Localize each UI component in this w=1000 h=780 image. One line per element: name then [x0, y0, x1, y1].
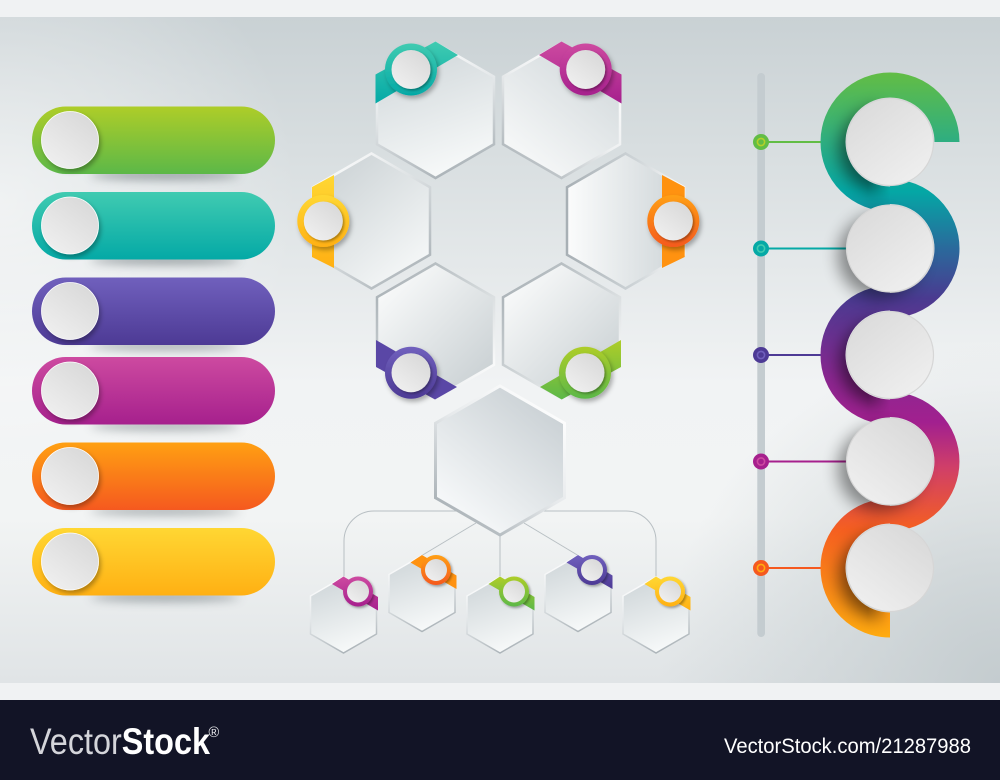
- marker 2 teal: [753, 240, 848, 256]
- bar 5: orange: [32, 442, 275, 515]
- marker 3 purple: [753, 347, 823, 363]
- footer logo: VectorStock: [30, 721, 210, 762]
- hexagon: lower right green: [503, 264, 621, 400]
- marker 4 magenta: [753, 454, 848, 470]
- hexagon: right orange: [567, 154, 699, 288]
- footer image id: VectorStock.com/21287988: [724, 735, 971, 758]
- timeline discs: [838, 98, 934, 619]
- hexagon: top left teal: [376, 42, 494, 178]
- marker 5 orange: [753, 560, 823, 576]
- connector lines: [344, 511, 656, 580]
- small hexagon: yellow: [623, 576, 690, 653]
- footer band: [0, 700, 1000, 780]
- small hexagon: magenta: [310, 576, 378, 653]
- serpentine gradient ribbon: [833, 85, 947, 625]
- panel: hexagon ring: [297, 42, 699, 400]
- bar 3: purple: [32, 278, 275, 350]
- hexagon: left yellow: [297, 154, 430, 288]
- panel: pill bars: [32, 106, 275, 601]
- marker 1 green: [753, 134, 823, 150]
- bar 6: yellow: [32, 528, 275, 601]
- panel: timeline: [753, 73, 947, 637]
- bar 4: magenta: [32, 357, 275, 430]
- bar 2: teal: [32, 192, 275, 264]
- panel: hexagon tree: [310, 386, 690, 653]
- timeline vertical rail: [757, 73, 765, 637]
- small hexagon: purple: [545, 555, 612, 632]
- bar 1: green: [32, 106, 275, 179]
- hexagon: lower left purple: [376, 264, 494, 400]
- small hexagon: orange: [389, 555, 456, 632]
- hexagon: top right magenta: [503, 42, 622, 178]
- central hexagon: [436, 386, 564, 535]
- registered mark: ®: [208, 725, 220, 741]
- small hexagon: green: [467, 576, 534, 653]
